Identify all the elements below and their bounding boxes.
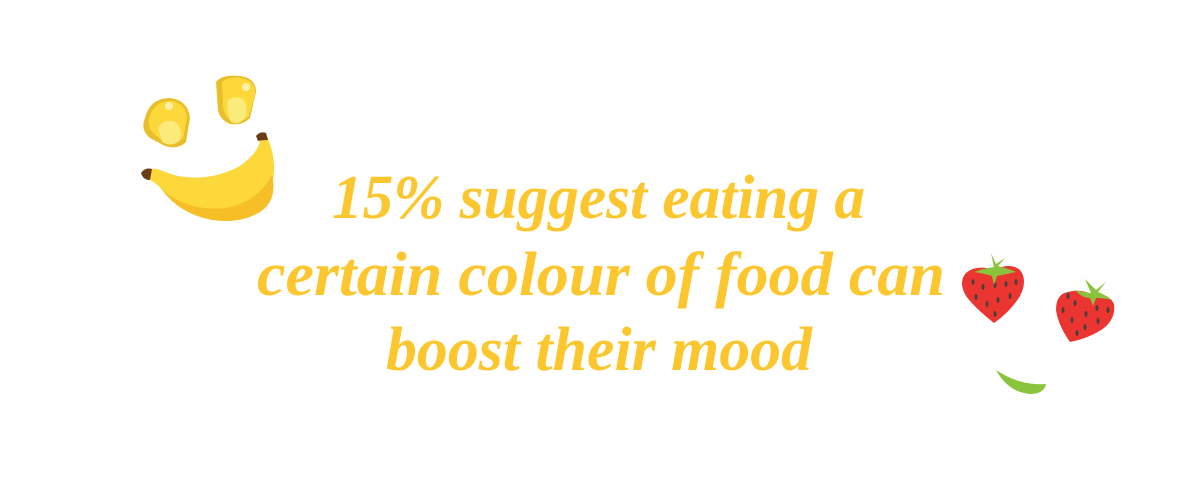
headline text: boost their mood — [386, 316, 813, 384]
icon: strawberry right — [1056, 279, 1114, 342]
icon: green mouth slice — [996, 370, 1046, 394]
headline text: certain colour of food can — [257, 241, 945, 309]
headline text — [257, 164, 945, 384]
icon: corn kernel left — [143, 98, 190, 147]
headline text: 15% suggest eating a — [332, 164, 865, 232]
icon: corn kernel right — [216, 76, 256, 124]
icon: banana — [141, 132, 274, 221]
icon: strawberry left — [962, 253, 1024, 323]
